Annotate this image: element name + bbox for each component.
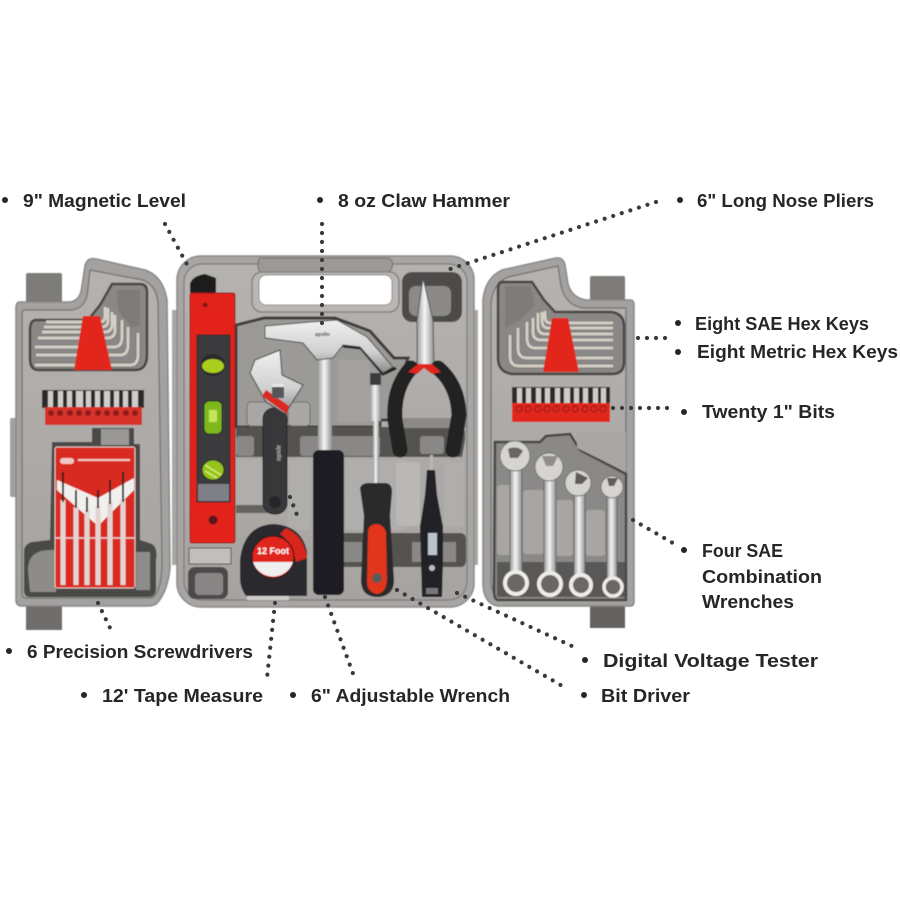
label: 6 Precision Screwdrivers: 6 Precision Screwdrivers: [27, 642, 253, 662]
label: 6" Adjustable Wrench: 6" Adjustable Wrench: [311, 686, 510, 706]
tool: right bit set: [512, 387, 610, 422]
hex key recess: [498, 282, 624, 374]
vial: bottom: [202, 460, 224, 480]
leader line: hex keys: [638, 336, 668, 340]
wrench 2: [535, 453, 563, 595]
tool: digital voltage tester: [420, 455, 443, 597]
tool: tape measure: [240, 524, 307, 600]
tool: eight SAE hex keys: [35, 307, 138, 370]
tool: bit driver: [360, 373, 394, 597]
label: Eight SAE Hex Keys: Eight SAE Hex Keys: [695, 314, 869, 334]
label: 8 oz Claw Hammer: 8 oz Claw Hammer: [338, 191, 510, 211]
leader line: claw hammer: [320, 224, 324, 324]
tool: long nose pliers: [395, 278, 459, 450]
leader line: precision screwdrivers: [98, 603, 112, 632]
panel: left case wing: [10, 259, 170, 630]
tool: claw hammer: [265, 320, 396, 595]
tool: eight metric hex keys: [510, 311, 613, 372]
tool: adjustable wrench: [250, 350, 303, 514]
vial: center: [204, 401, 222, 434]
panel: right case wing: [483, 258, 634, 628]
label: Four SAE Combination Wrenches: Wrenches: [702, 592, 794, 612]
leader line: twenty bits: [613, 406, 676, 410]
tool: magnetic level: [190, 274, 235, 543]
leader line: adjustable wrench: [290, 497, 355, 679]
label: 6" Long Nose Pliers: 6" Long Nose Pliers: [697, 191, 874, 211]
screwdriver recess: [24, 428, 156, 597]
tool: SAE combination wrenches: [500, 441, 623, 596]
hex key recess: [30, 284, 147, 370]
leader line: bit driver: [397, 590, 564, 687]
wrench recess: [494, 434, 626, 600]
handle opening: [252, 272, 399, 312]
leader line: combination wrenches: [633, 520, 678, 546]
label: 9" Magnetic Level: 9" Magnetic Level: [23, 191, 186, 211]
wrench 1: [500, 441, 530, 594]
leader line: digital voltage tester: [457, 593, 574, 647]
handle grip: [258, 258, 392, 273]
tool: precision screwdriver case: [55, 447, 135, 588]
label: Eight Metric Hex Keys: Eight Metric Hex Keys: [697, 342, 898, 362]
tool recess: [236, 318, 408, 427]
tape face: 12 Foot: [257, 546, 289, 556]
wrench 4: [601, 476, 623, 596]
label: Twenty 1" Bits: Twenty 1" Bits: [702, 402, 835, 422]
label: Bit Driver: Bit Driver: [601, 686, 690, 706]
wrench 3: [565, 470, 591, 595]
leader line: tape measure: [267, 603, 275, 678]
label: Four SAE Combination Wrenches: [681, 541, 822, 612]
leader line: long nose pliers: [447, 202, 656, 270]
tool kit photo: [10, 256, 634, 630]
leader line: magnetic level: [165, 224, 190, 270]
panel: center case with handle: [172, 256, 478, 607]
tool: adjustable wrench: apollo: [275, 445, 281, 462]
label: Four SAE Combination Wrenches: Four SAE: [702, 541, 783, 561]
tool: left bit set: [42, 390, 144, 425]
vial: top: [201, 354, 225, 376]
lower channel: [337, 533, 466, 567]
label: Digital Voltage Tester: Digital Voltage Tester: [603, 651, 818, 671]
tool: claw hammer: apollo: [315, 332, 330, 338]
pliers recess: [402, 272, 462, 322]
label: 12' Tape Measure: 12' Tape Measure: [102, 686, 263, 706]
tray channel: [236, 427, 465, 457]
label: Four SAE Combination Wrenches: Combination: [702, 567, 822, 587]
